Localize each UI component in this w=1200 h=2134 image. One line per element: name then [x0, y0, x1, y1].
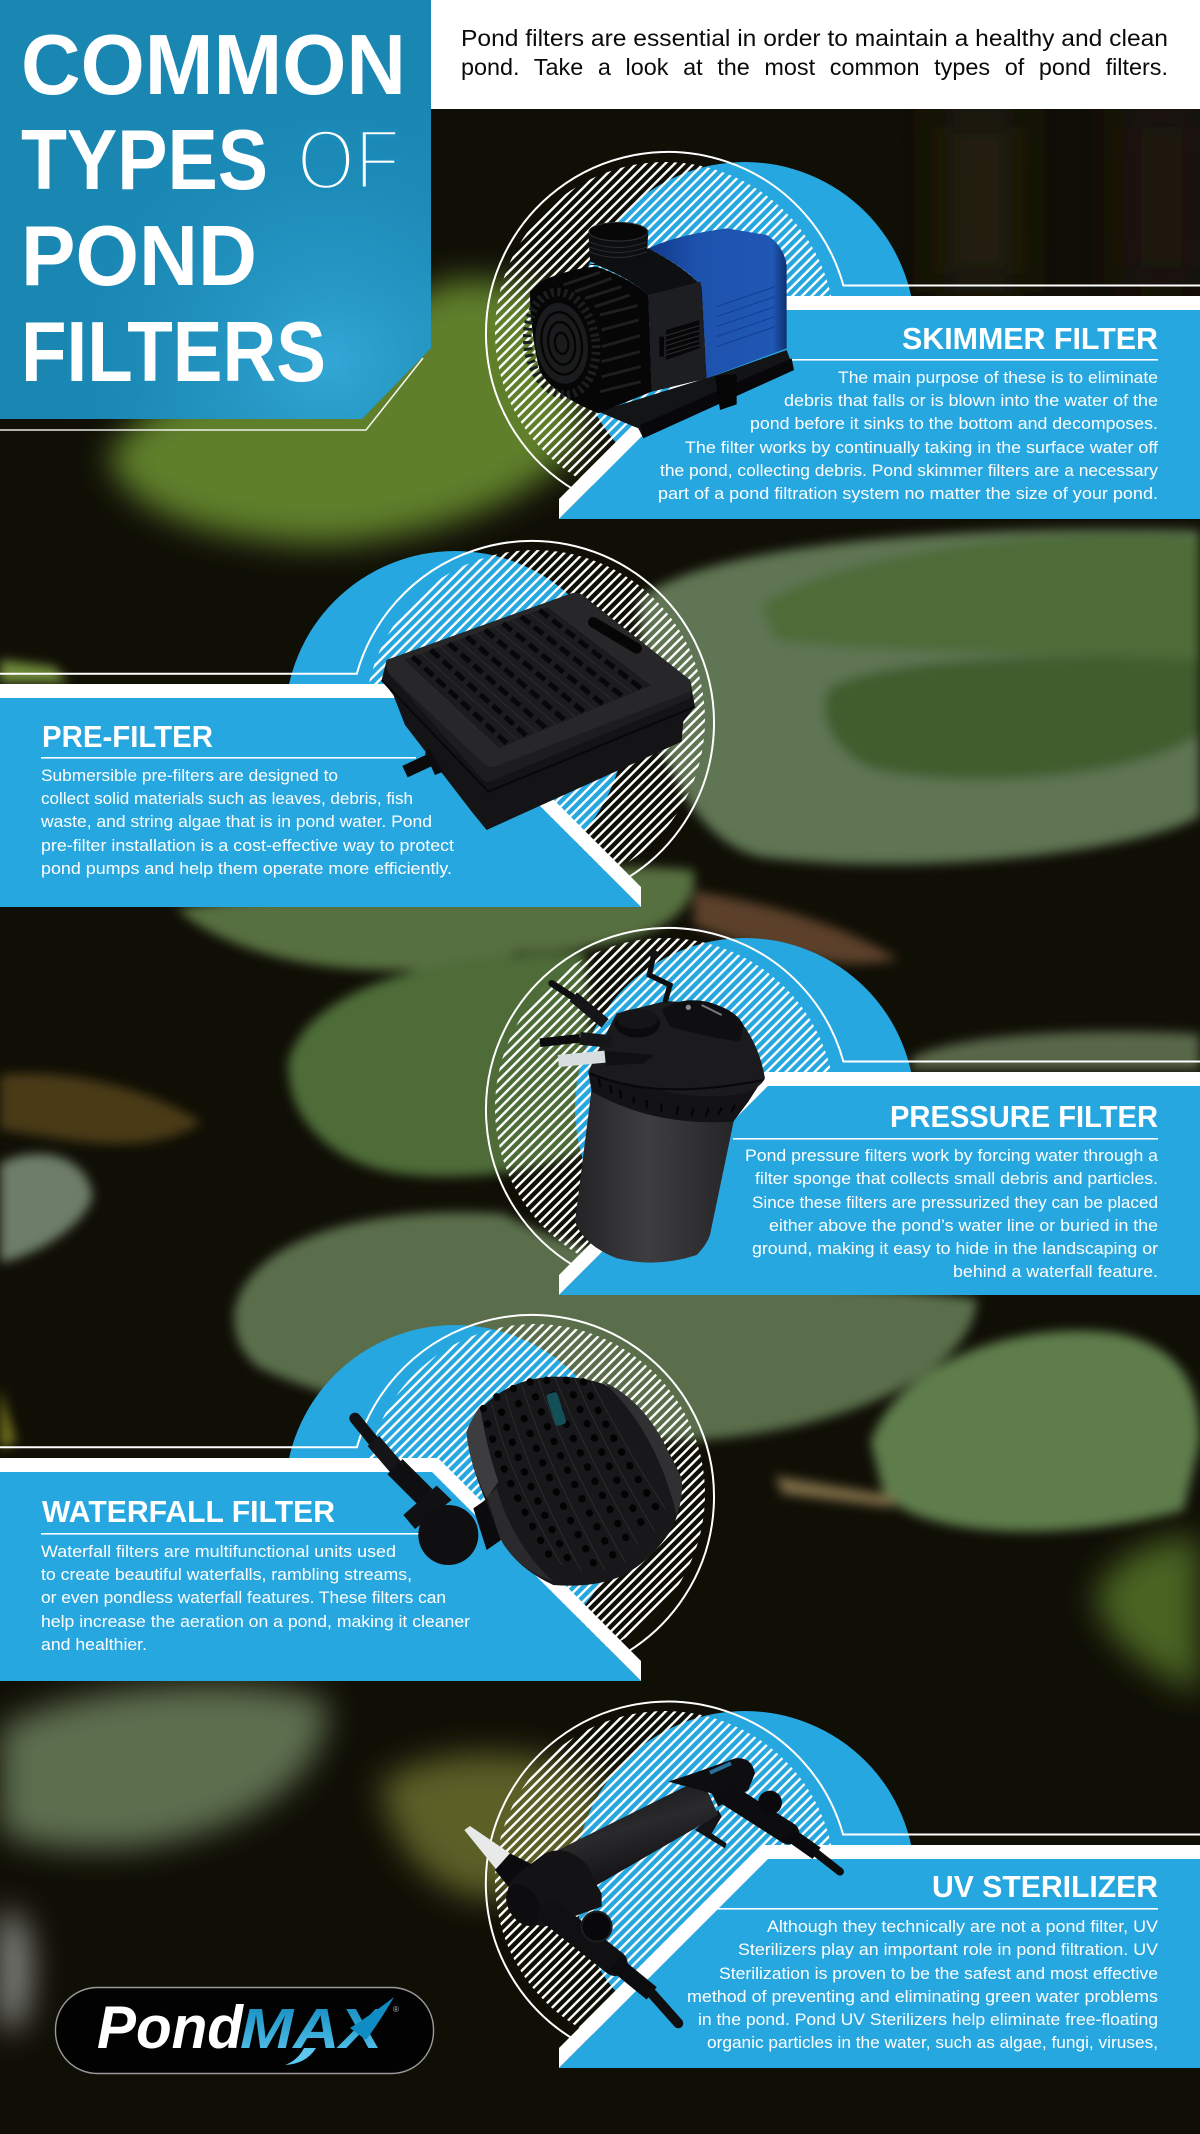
- heading: SKIMMER FILTER: [902, 321, 1158, 356]
- body text: and healthier.: [41, 1635, 147, 1654]
- body text: part of a pond filtration system no matter the size of your pond.: [658, 484, 1158, 503]
- body text: debris that falls or is blown into the water of the: [784, 391, 1158, 410]
- body text: Pond pressure filters work by forcing water through a: [745, 1146, 1159, 1165]
- heading: PRESSURE FILTER: [890, 1099, 1158, 1134]
- title text: [21, 18, 406, 400]
- heading: WATERFALL FILTER: [42, 1494, 335, 1529]
- body text: Waterfall filters are multifunctional units used: [41, 1542, 396, 1561]
- body text: The main purpose of these is to eliminate: [838, 368, 1158, 387]
- body text: to create beautiful waterfalls, rambling streams,: [41, 1565, 412, 1584]
- body text: [745, 1146, 1159, 1281]
- icon: pressure filter canister: [540, 950, 765, 1263]
- icon: pre-filter box: [382, 593, 695, 830]
- body text: Since these filters are pressurized they can be placed: [752, 1193, 1158, 1212]
- section: UV sterilizer: [464, 1702, 1200, 2068]
- body text: Sterilizers play an important role in pond filtration. UV: [738, 1940, 1159, 1959]
- section: pre-filter: [0, 541, 714, 907]
- title text: OF: [297, 113, 400, 208]
- body text: behind a waterfall feature.: [953, 1262, 1158, 1281]
- body text: pond before it sinks to the bottom and decomposes.: [750, 414, 1158, 433]
- text panel: [0, 684, 641, 907]
- body text: filter sponge that collects small debris and particles.: [755, 1169, 1158, 1188]
- icon: waterfall pump: [355, 1377, 682, 1586]
- body text: or even pondless waterfall features. These filters can: [41, 1588, 446, 1607]
- body text: Submersible pre-filters are designed to: [41, 766, 338, 785]
- body text: Although they technically are not a pond filter, UV: [767, 1917, 1159, 1936]
- text panel: [559, 1072, 1200, 1295]
- circle graphic: [0, 541, 714, 891]
- body text: organic particles in the water, such as algae, fungi, viruses,: [707, 2033, 1158, 2052]
- heading: PRE-FILTER: [42, 719, 213, 754]
- body text: Sterilization is proven to be the safest and most effective: [719, 1964, 1158, 1983]
- body text: collect solid materials such as leaves, debris, fish: [41, 789, 413, 808]
- body text: ground, making it easy to hide in the landscaping or: [752, 1239, 1158, 1258]
- heading: UV STERILIZER: [932, 1869, 1158, 1904]
- text panel: [559, 1845, 1200, 2068]
- title text: TYPES: [21, 113, 268, 208]
- body text: method of preventing and eliminating green water problems: [687, 1987, 1158, 2006]
- title accent line: [0, 358, 423, 430]
- body text: pre-filter installation is a cost-effective way to protect: [41, 836, 454, 855]
- white intro strip: [431, 0, 1200, 109]
- section: skimmer filter: [486, 152, 1200, 519]
- title panel: [0, 0, 431, 419]
- body text: either above the pond’s water line or buried in the: [769, 1216, 1158, 1235]
- circle graphic: [0, 1315, 714, 1665]
- body text: in the pond. Pond UV Sterilizers help eliminate free-floating: [698, 2010, 1158, 2029]
- text panel: [559, 296, 1200, 519]
- title text: COMMON: [21, 18, 406, 113]
- body text: [40, 766, 454, 878]
- icon: UV sterilizer tube: [464, 1758, 840, 2023]
- body text: help increase the aeration on a pond, making it cleaner: [41, 1612, 470, 1631]
- circle graphic: [486, 152, 1200, 502]
- section: pressure filter: [486, 928, 1200, 1295]
- intro text: pond. Take a look at the most common types of pond filters.: [461, 54, 1168, 80]
- logo: PondMAX: MAX: [240, 1997, 385, 2061]
- logo: PondMAX: Pond: [97, 1994, 244, 2061]
- body text: The filter works by continually taking in the surface water off: [685, 438, 1158, 457]
- logo: PondMAX: [56, 1988, 434, 2074]
- title text: POND: [21, 209, 257, 304]
- body text: [687, 1917, 1159, 2052]
- body text: [658, 368, 1159, 503]
- intro text: Pond filters are essential in order to maintain a healthy and clean: [461, 25, 1168, 51]
- logo: PondMAX: ®: [393, 2005, 399, 2014]
- circle graphic: [486, 928, 1200, 1278]
- title text: FILTERS: [21, 305, 326, 400]
- section: waterfall filter: [0, 1315, 714, 1681]
- body text: the pond, collecting debris. Pond skimmer filters are a necessary: [660, 461, 1159, 480]
- body text: pond pumps and help them operate more efficiently.: [41, 859, 452, 878]
- circle graphic: [486, 1702, 1200, 2051]
- intro text: [461, 25, 1168, 80]
- body text: waste, and string algae that is in pond water. Pond: [40, 812, 432, 831]
- text panel: [0, 1458, 641, 1681]
- body text: [41, 1542, 470, 1654]
- icon: submersible pump: [521, 222, 794, 438]
